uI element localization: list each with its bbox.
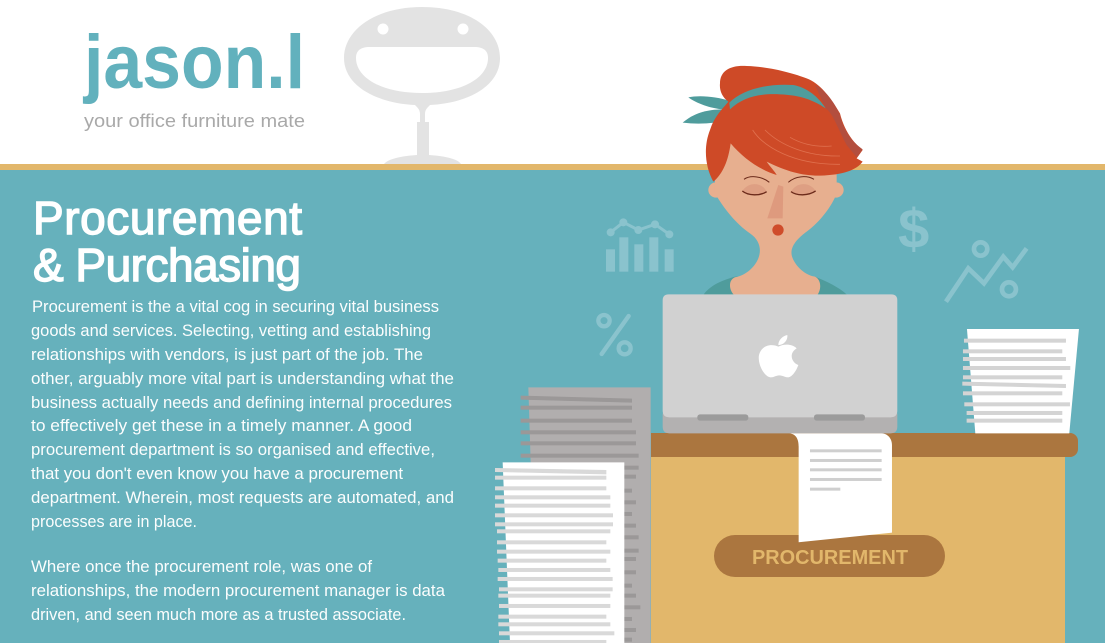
icon: percent sign	[598, 315, 631, 354]
icon: faded chair	[344, 7, 500, 164]
nose	[767, 185, 783, 218]
text block: procurement description: department. Wherein, most requests are automated, and	[31, 488, 454, 507]
text block: procurement description: to effectively get these in a timely manner. A good	[31, 416, 412, 435]
headband	[729, 85, 826, 109]
icons: faded background data symbols	[598, 197, 1027, 354]
stack of papers: grey back sheet	[521, 387, 651, 643]
hair highlights	[753, 130, 840, 164]
text block: procurement description: processes are in place.	[31, 512, 197, 531]
face and neck	[715, 130, 837, 296]
laptop	[663, 294, 897, 433]
laptop lid	[663, 294, 897, 417]
procurement badge: PROCUREMENT	[752, 547, 908, 569]
title: Procurement	[33, 192, 302, 244]
text block: modern procurement role: Where once the procurement role, was one of	[31, 557, 372, 576]
desk	[651, 433, 1078, 643]
procurement badge	[714, 535, 945, 577]
shirt	[703, 277, 847, 295]
hair	[706, 66, 863, 182]
text block: procurement description: that you don't even know you have a procurement	[31, 464, 403, 483]
hair shadow	[815, 85, 863, 157]
paper hanging over desk	[789, 433, 892, 542]
eyes	[742, 177, 816, 195]
text block: procurement description: goods and services. Selecting, vetting and establishing	[31, 321, 431, 340]
stack of papers: white front sheet	[495, 462, 624, 643]
mouth	[772, 224, 784, 236]
text block: modern procurement role: driven, and seen much more as a trusted associate.	[31, 605, 406, 624]
ears	[708, 182, 844, 198]
paper on desk right	[963, 329, 1079, 433]
hinges	[697, 414, 865, 421]
text block: procurement description: business actually needs and defining internal procedures	[31, 393, 452, 412]
laptop base	[663, 413, 897, 433]
text block: procurement description: Procurement is the a vital cog in securing vital business	[32, 297, 439, 316]
logo: jason.l: jason.l	[82, 20, 305, 105]
panel: teal background	[0, 170, 1105, 643]
text block: modern procurement role: relationships, the modern procurement manager is data	[31, 581, 446, 600]
title: & Purchasing	[33, 239, 301, 291]
illustration: woman	[683, 66, 863, 296]
logo tagline: your office furniture mate	[84, 110, 305, 131]
icon: rising line chart	[946, 242, 1027, 302]
icon: dollar sign: $	[898, 197, 929, 260]
title	[33, 192, 302, 291]
icon: apple logo	[759, 335, 798, 377]
text block: procurement description: relationships with vendors, is just part of the job. The	[31, 345, 423, 364]
desk top	[651, 433, 1078, 457]
text block: modern procurement role	[31, 557, 446, 624]
text block: procurement description: other, arguably more vital part is understanding what the	[31, 369, 454, 388]
text block: procurement description: procurement department is so organised and effective,	[31, 440, 435, 459]
hair bow	[683, 96, 730, 124]
header stripe	[0, 164, 1105, 170]
desk body	[651, 455, 1065, 643]
icon: bar and line chart	[606, 218, 674, 272]
text block: procurement description	[31, 297, 454, 531]
